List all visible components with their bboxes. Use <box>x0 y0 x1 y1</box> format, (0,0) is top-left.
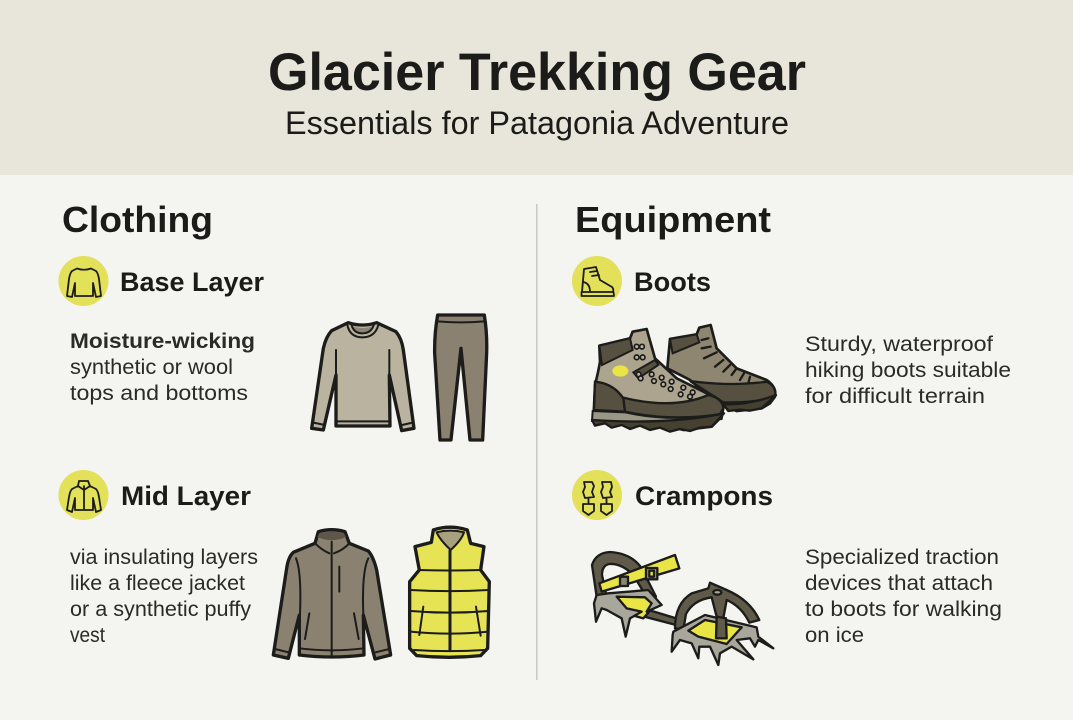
icon: boot <box>572 256 622 306</box>
illustration: base layer top <box>312 323 414 431</box>
text: base layer description: tops and bottoms <box>70 381 248 405</box>
text: boots description <box>805 332 1011 408</box>
icon: base layer shirt <box>58 256 108 306</box>
text: boots description: for difficult terrain <box>805 384 985 408</box>
panel: clothing <box>58 199 489 659</box>
illustration: puffy vest <box>410 527 489 657</box>
icon: crampons <box>572 470 622 520</box>
illustration: fleece jacket <box>273 530 391 659</box>
text: mid layer description <box>70 545 258 647</box>
rear boot <box>667 325 776 411</box>
text: base layer description: Moisture-wicking <box>70 329 255 353</box>
text: mid layer description: via insulating layers <box>70 545 258 569</box>
heading: base layer: Base Layer <box>120 267 264 297</box>
text: mid layer description: or a synthetic puffy <box>70 597 251 621</box>
text: boots description: Sturdy, waterproof <box>805 332 993 356</box>
heading: crampons: Crampons <box>635 481 773 511</box>
text: crampons description: to boots for walking <box>805 597 1002 621</box>
icon: mid layer jacket <box>58 470 108 520</box>
title: Glacier Trekking Gear <box>268 43 806 102</box>
front boot <box>592 329 724 432</box>
heading: equipment: Equipment <box>575 199 771 240</box>
text: crampons description <box>805 545 1002 647</box>
text: mid layer description: vest <box>70 623 105 647</box>
heading: clothing: Clothing <box>62 199 213 240</box>
panel: equipment <box>572 199 1011 665</box>
illustration: crampons <box>592 552 773 665</box>
heading: boots: Boots <box>634 267 711 297</box>
text: crampons description: devices that attach <box>805 571 993 595</box>
illustration: hiking boots <box>592 325 776 432</box>
heading: mid layer: Mid Layer <box>121 481 251 511</box>
text: crampons description: Specialized traction <box>805 545 999 569</box>
text: boots description: hiking boots suitable <box>805 358 1011 382</box>
illustration: base layer leggings <box>435 315 487 440</box>
text: base layer description: synthetic or wool <box>70 355 233 379</box>
text: mid layer description: like a fleece jacket <box>70 571 245 595</box>
text: base layer description <box>70 329 255 405</box>
header band <box>0 0 1073 175</box>
subtitle: Essentials for Patagonia Adventure <box>285 105 789 141</box>
front crampon <box>672 583 773 665</box>
rear crampon <box>592 552 682 637</box>
text: crampons description: on ice <box>805 623 864 647</box>
